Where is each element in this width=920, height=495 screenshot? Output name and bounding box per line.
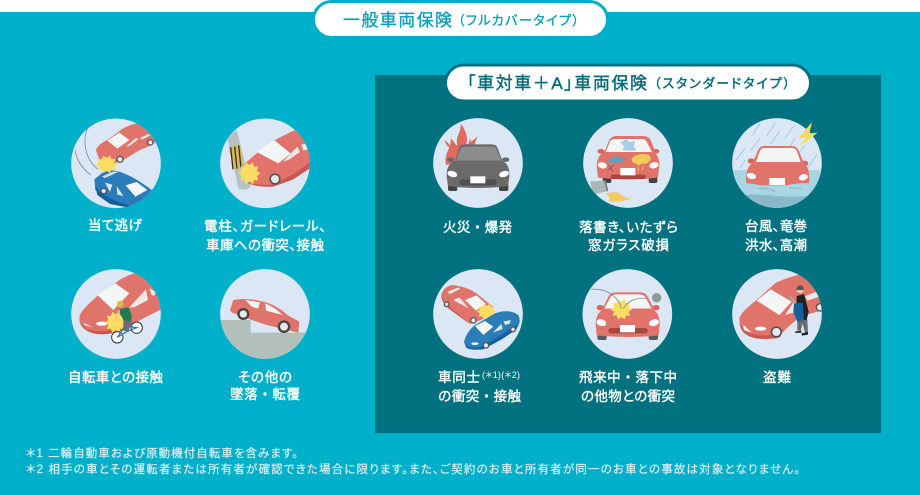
item: car to car collision: の衝突・接触 xyxy=(438,389,522,404)
item: typhoon, tornado, flood, storm surge: 台風、竜巻 xyxy=(745,219,808,234)
item: pole, guardrail, garage contact xyxy=(204,118,326,253)
footnotes: ＊1 二輪自動車および原動機付自転車を含みます。 xyxy=(26,446,298,460)
item: other falls and rollovers: 墜落・転覆 xyxy=(230,387,300,402)
item: car to car collision: (＊1)(＊2) xyxy=(482,370,520,380)
heading: general vehicle insurance full cover: 一般車両保険 xyxy=(343,11,452,30)
item: pole, guardrail, garage contact: 電柱、ガードレール、 xyxy=(204,219,326,234)
footnotes xyxy=(26,446,800,476)
item: hit and run xyxy=(71,118,161,233)
item: bicycle contact xyxy=(68,268,164,385)
panel: standard type xyxy=(375,75,881,433)
item: graffiti, mischief, broken window glass: 落書き、いたずら xyxy=(579,220,678,235)
footnotes: ＊2 相手の車とその運転者または所有者が確認できた場合に限ります。また、ご契約のお車と所有者が同一のお車との事故は対象となりません。 xyxy=(26,462,800,476)
heading: standard type vehicle insurance: （スタンダードタイプ） xyxy=(654,76,790,91)
heading: general vehicle insurance full cover: （フルカバータイプ） xyxy=(458,13,579,28)
heading: standard type vehicle insurance: 「車対車＋A」車両保険 xyxy=(467,74,647,93)
heading: general vehicle insurance full cover xyxy=(314,2,608,38)
item: other falls and rollovers: その他の xyxy=(238,370,292,385)
heading: standard type vehicle insurance xyxy=(446,65,810,101)
item: fire and explosion: 火災・爆発 xyxy=(443,220,512,235)
item: pole, guardrail, garage contact: 車庫への衝突、接触 xyxy=(206,238,324,253)
item: graffiti, mischief, broken window glass xyxy=(579,118,678,253)
item: hit and run: 当て逃げ xyxy=(88,218,143,233)
item: fire and explosion xyxy=(433,118,523,235)
item: flying or falling object collision: の他物との衝突 xyxy=(581,389,675,404)
item: theft xyxy=(732,269,824,385)
item: other falls and rollovers xyxy=(219,269,312,402)
item: bicycle contact: 自転車との接触 xyxy=(68,370,164,385)
item: typhoon, tornado, flood, storm surge: 洪水、高潮 xyxy=(745,237,807,253)
item: theft: 盗難 xyxy=(763,370,791,385)
item: typhoon, tornado, flood, storm surge xyxy=(730,118,827,253)
item: car to car collision: 車同士 xyxy=(438,370,480,385)
item: flying or falling object collision xyxy=(579,269,677,404)
item: car to car collision xyxy=(433,269,523,404)
item: flying or falling object collision: 飛来中・落下中 xyxy=(579,370,677,385)
item: graffiti, mischief, broken window glass: 窓ガラス破損 xyxy=(588,238,670,253)
